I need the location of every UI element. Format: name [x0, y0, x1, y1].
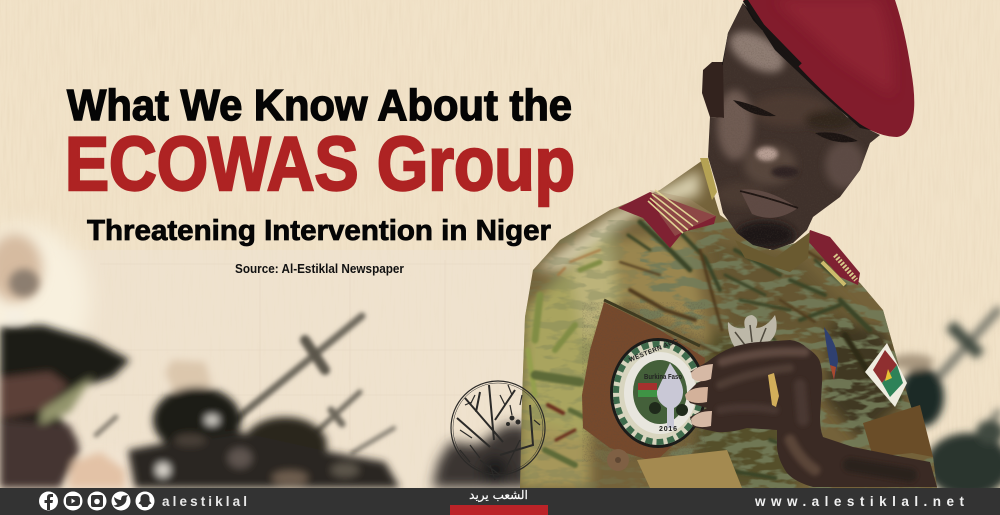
title block: [65, 81, 575, 276]
rolled sleeve and button: [607, 405, 933, 488]
soldier figure: [515, 0, 945, 490]
blurred rifles background right: [885, 308, 1000, 497]
source line: Source: Al-Estiklal Newspaper: [235, 262, 404, 276]
icon: facebook: [39, 492, 58, 510]
patch text: Burkina Faso: [644, 374, 682, 381]
Western Accord arm patch: [610, 338, 706, 448]
footer bar: [0, 488, 1000, 515]
title line three: Threatening Intervention in Niger: [87, 215, 551, 247]
hand holding patch: [685, 340, 937, 487]
patch text: WESTERN ACC: [628, 338, 679, 364]
epaulette left: [618, 190, 716, 248]
red tab: [450, 505, 548, 515]
patch text: [628, 338, 682, 433]
Burkina Faso flag patch: [865, 343, 907, 407]
logo seal: [451, 381, 545, 480]
eagle badge and medal: [728, 315, 838, 380]
patch text: 2016: [659, 426, 677, 433]
collar: [700, 158, 810, 272]
icon: youtube: [64, 492, 82, 510]
dark blur behind logo: [432, 425, 530, 488]
blurred rifles and crowd: [96, 316, 400, 488]
icon: twitter: [112, 492, 130, 510]
website: www.alestiklal.net: [754, 494, 964, 509]
slogan: الشعب يريد: [469, 488, 528, 503]
uniform: [515, 150, 945, 490]
title line two: ECOWAS Group: [65, 122, 575, 207]
epaulette right: [807, 230, 860, 285]
red beret: [743, 0, 914, 137]
velcro sleeve patch: [582, 300, 705, 462]
head and face: [695, 0, 885, 255]
social handle: alestiklal: [162, 494, 247, 509]
title line one: What We Know About the: [67, 81, 572, 130]
icon: snapchat: [136, 492, 154, 510]
icon: instagram: [88, 492, 106, 510]
blurred soldiers background left: [0, 225, 152, 488]
